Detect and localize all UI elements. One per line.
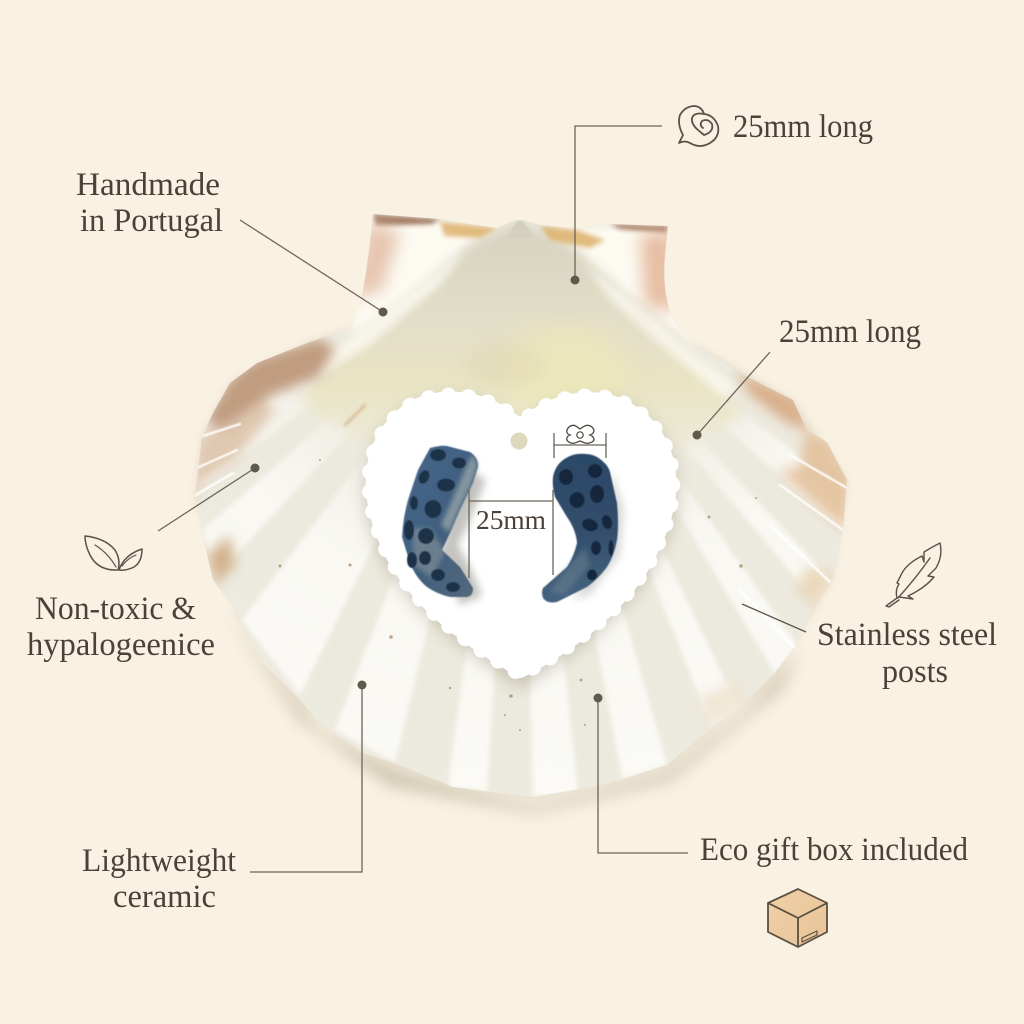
- brown ear tints: [373, 214, 668, 248]
- ridge highlights: [322, 258, 459, 375]
- icon: feather: [886, 543, 941, 607]
- left brown wash: [205, 338, 335, 432]
- ears, near white: [352, 221, 474, 330]
- infographic canvas: [27, 105, 996, 948]
- label: lightweight: Lightweight: [82, 843, 236, 879]
- label: right 25mm long: 25mm long: [779, 314, 921, 350]
- label: lightweight: [82, 843, 236, 915]
- leader: eco box: [594, 694, 688, 853]
- scallop shell photo: [190, 214, 852, 797]
- label: non-toxic: Non-toxic &: [35, 591, 196, 627]
- label: handmade: in Portugal: [80, 203, 223, 239]
- right earring: [542, 454, 624, 602]
- card hole: [510, 432, 528, 450]
- leader: right 25mm: [692, 352, 770, 440]
- dimension: 25mm length: [469, 490, 553, 578]
- leader: stainless: [742, 604, 806, 632]
- dimension: 25mm length: 25mm: [476, 505, 546, 535]
- label: eco box: Eco gift box included: [700, 832, 968, 868]
- left earring: [402, 446, 486, 605]
- label: handmade: [76, 167, 223, 239]
- label: stainless: Stainless steel: [817, 617, 997, 653]
- label: non-toxic: [27, 591, 215, 663]
- dimension: width with post icon: [554, 425, 606, 458]
- central cavity: [300, 220, 742, 444]
- label: top 25mm long: 25mm long: [733, 109, 873, 145]
- apex nub: [512, 220, 528, 232]
- leader: top 25mm: [570, 126, 662, 284]
- shell shadow: [195, 330, 847, 812]
- label: stainless: posts: [882, 654, 948, 690]
- raised ribs fanning from hinge: [202, 393, 842, 796]
- leader: lightweight: [250, 680, 366, 872]
- leader: handmade: [240, 220, 388, 316]
- leader: non-toxic: [158, 464, 260, 531]
- icon: leaves: [85, 536, 142, 570]
- scalloped heart card: [370, 396, 672, 674]
- rib rim highlights: [194, 424, 847, 648]
- label: stainless: [817, 617, 997, 690]
- speckles: [278, 459, 757, 731]
- label: lightweight: ceramic: [113, 879, 216, 915]
- right brown wash: [735, 370, 812, 430]
- icon: box: [768, 889, 827, 947]
- icon: chat spiral: [679, 106, 718, 146]
- heart card shadow: [365, 398, 677, 688]
- label: handmade: Handmade: [76, 167, 220, 203]
- label: non-toxic: hypalogeenice: [27, 627, 215, 663]
